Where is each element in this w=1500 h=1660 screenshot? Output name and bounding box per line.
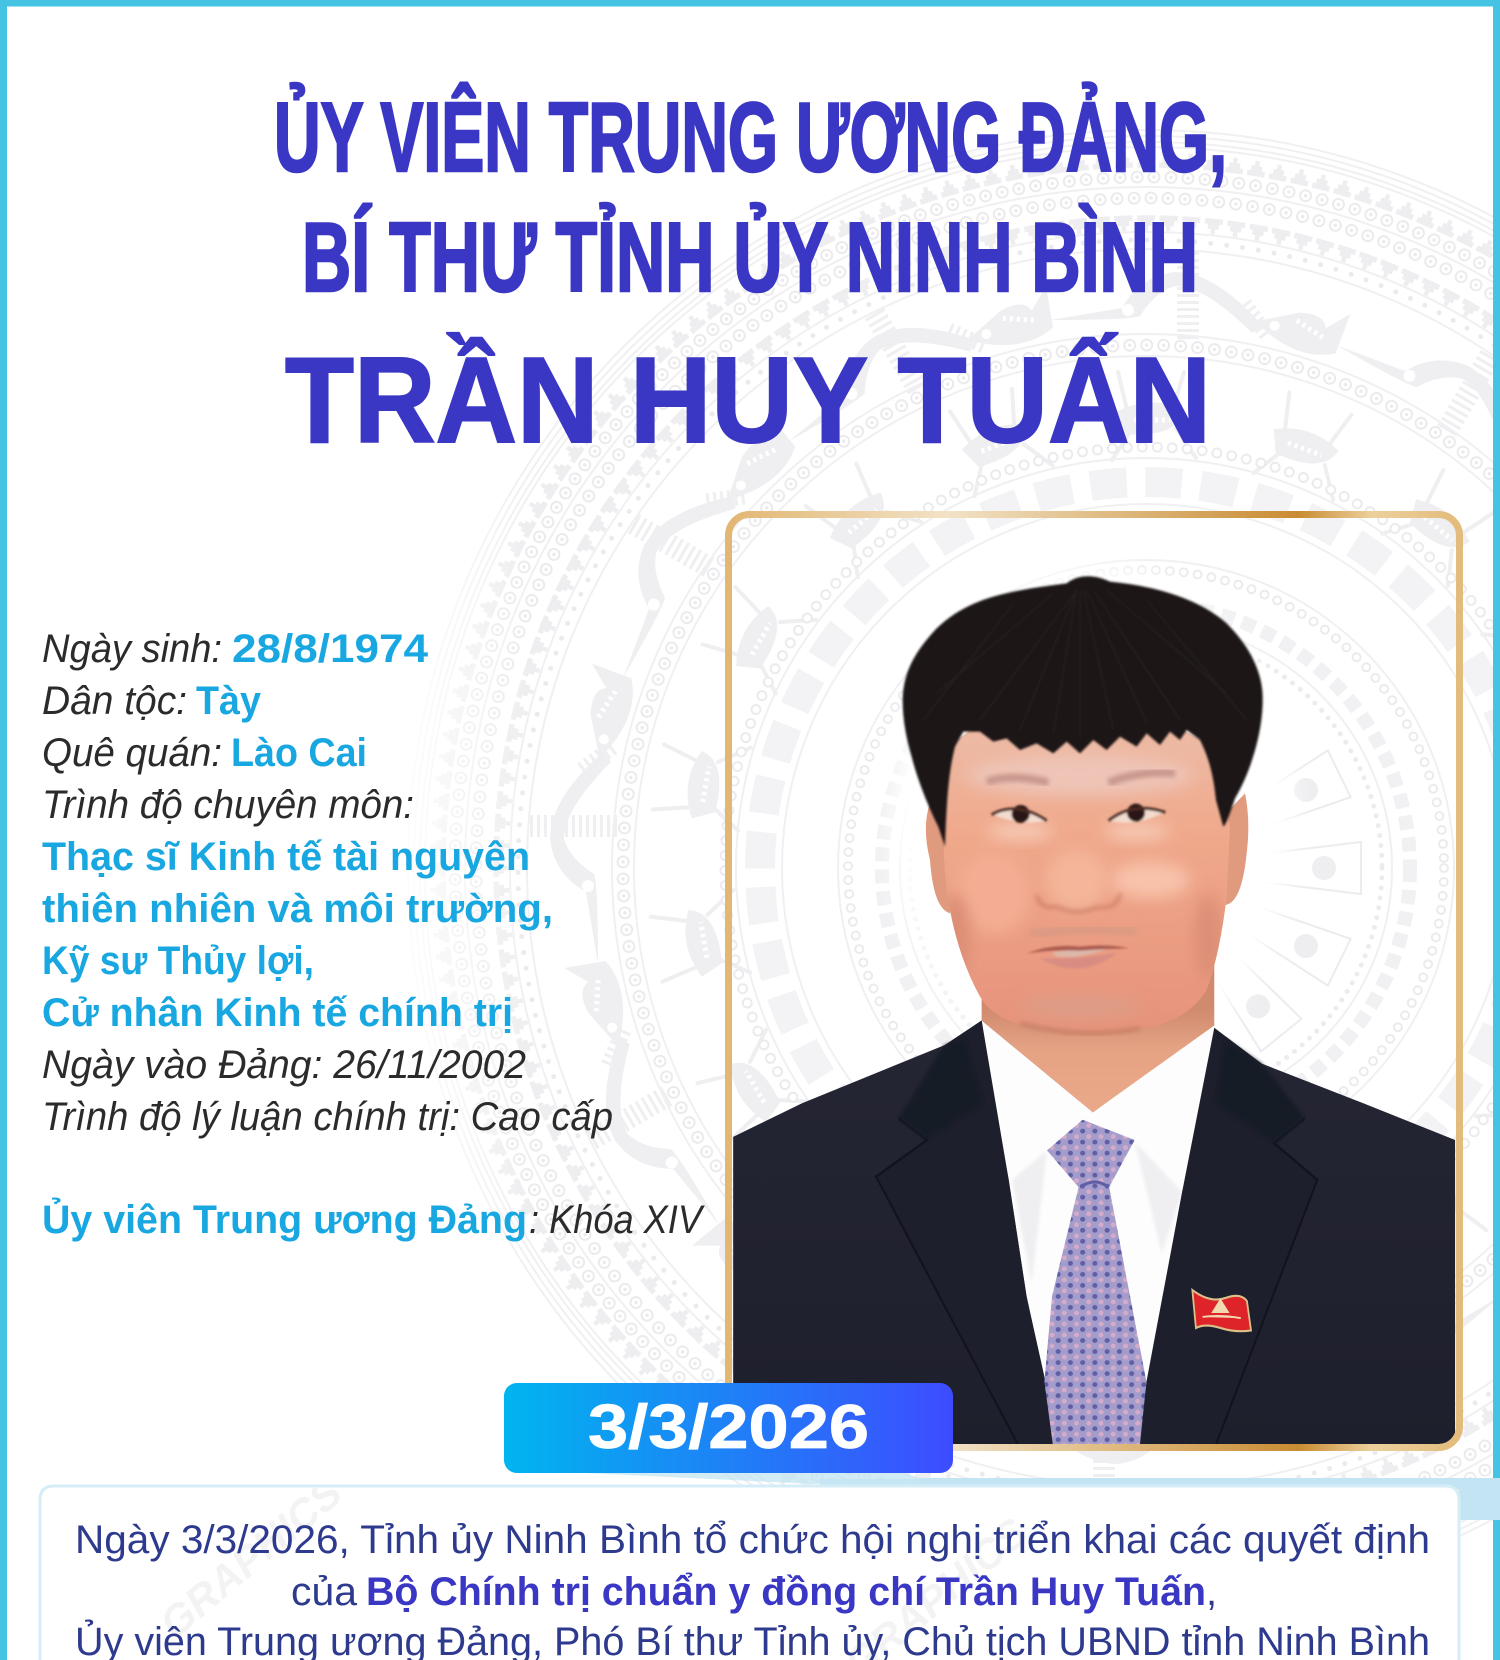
qualifications: Thạc sĩ Kinh tế tài nguyên: [42, 835, 530, 879]
qualifications: thiên nhiên và môi trường,: [42, 887, 553, 931]
date of birth: [42, 627, 429, 671]
portrait photo: [733, 567, 1455, 1446]
nose: [1037, 893, 1121, 912]
panel text line 1: Ngày 3/3/2026, Tỉnh ủy Ninh Bình tổ chức hội nghị triển khai các quyết định: [75, 1518, 1430, 1562]
lapel lines: [876, 1119, 1317, 1446]
hair: [903, 576, 1263, 847]
panel text line 2: ,: [1206, 1570, 1217, 1614]
date badge: [504, 1383, 953, 1473]
soft glow behind figure: [898, 567, 1293, 1002]
biography text block: [42, 627, 705, 1242]
party pin: [1192, 1290, 1251, 1331]
mouth: [1027, 945, 1129, 969]
qualifications: Cử nhân Kinh tế chính trị: [42, 991, 513, 1035]
face: [944, 730, 1230, 1030]
central committee term: : Khóa XIV: [529, 1198, 705, 1242]
ethnicity: Tày: [196, 679, 262, 723]
date badge: 3/3/2026: [588, 1393, 869, 1462]
decorative band behind text panel: [585, 1473, 1500, 1520]
panel text line 2: Bộ Chính trị chuẩn y đồng chí Trần Huy Tuấn: [366, 1570, 1206, 1614]
hometown: Lào Cai: [231, 731, 367, 775]
shirt: [982, 1021, 1214, 1388]
central committee term: Ủy viên Trung ương Đảng: [42, 1196, 527, 1242]
date of birth: 28/8/1974: [232, 627, 429, 671]
party admission date: Ngày vào Đảng: 26/11/2002: [42, 1043, 526, 1087]
title: [274, 82, 1227, 468]
text panel: [40, 1468, 1459, 1660]
hometown: [42, 731, 367, 775]
ethnicity: Dân tộc:: [42, 679, 187, 723]
title line 3: name: TRẦN HUY TUẤN: [285, 331, 1211, 468]
panel text line 2: của: [291, 1570, 358, 1614]
qualifications: [42, 835, 553, 1035]
ears: [926, 793, 1248, 913]
eyes: [992, 804, 1165, 823]
right lapel: [1146, 1028, 1262, 1388]
collar notch shadows: [899, 1039, 1305, 1143]
neck: [982, 964, 1214, 1112]
qualifications: Kỹ sư Thủy lợi,: [42, 939, 314, 983]
watermark: [164, 1488, 1024, 1660]
chin shadow: [1020, 1023, 1140, 1033]
collar shading: [1012, 1142, 1182, 1284]
head: [903, 576, 1263, 1043]
background: bronze drum pattern: [400, 130, 1500, 1606]
political theory level: Trình độ lý luận chính trị: Cao cấp: [42, 1095, 613, 1139]
gold photo frame: [728, 514, 1460, 1448]
panel background: [40, 1486, 1459, 1660]
facial shading: [940, 755, 1222, 1019]
moustache: [1030, 929, 1137, 935]
qualification label: Trình độ chuyên môn:: [42, 783, 414, 827]
hometown: Quê quán:: [42, 731, 222, 775]
watermark: GRAPHICS: [151, 1468, 351, 1647]
left lapel: [944, 1020, 1031, 1316]
suit jacket: [733, 1021, 1455, 1446]
eyebrows: [987, 773, 1175, 783]
date of birth: Ngày sinh:: [42, 627, 222, 671]
tie: [1044, 1120, 1146, 1446]
ethnicity: [42, 679, 262, 723]
